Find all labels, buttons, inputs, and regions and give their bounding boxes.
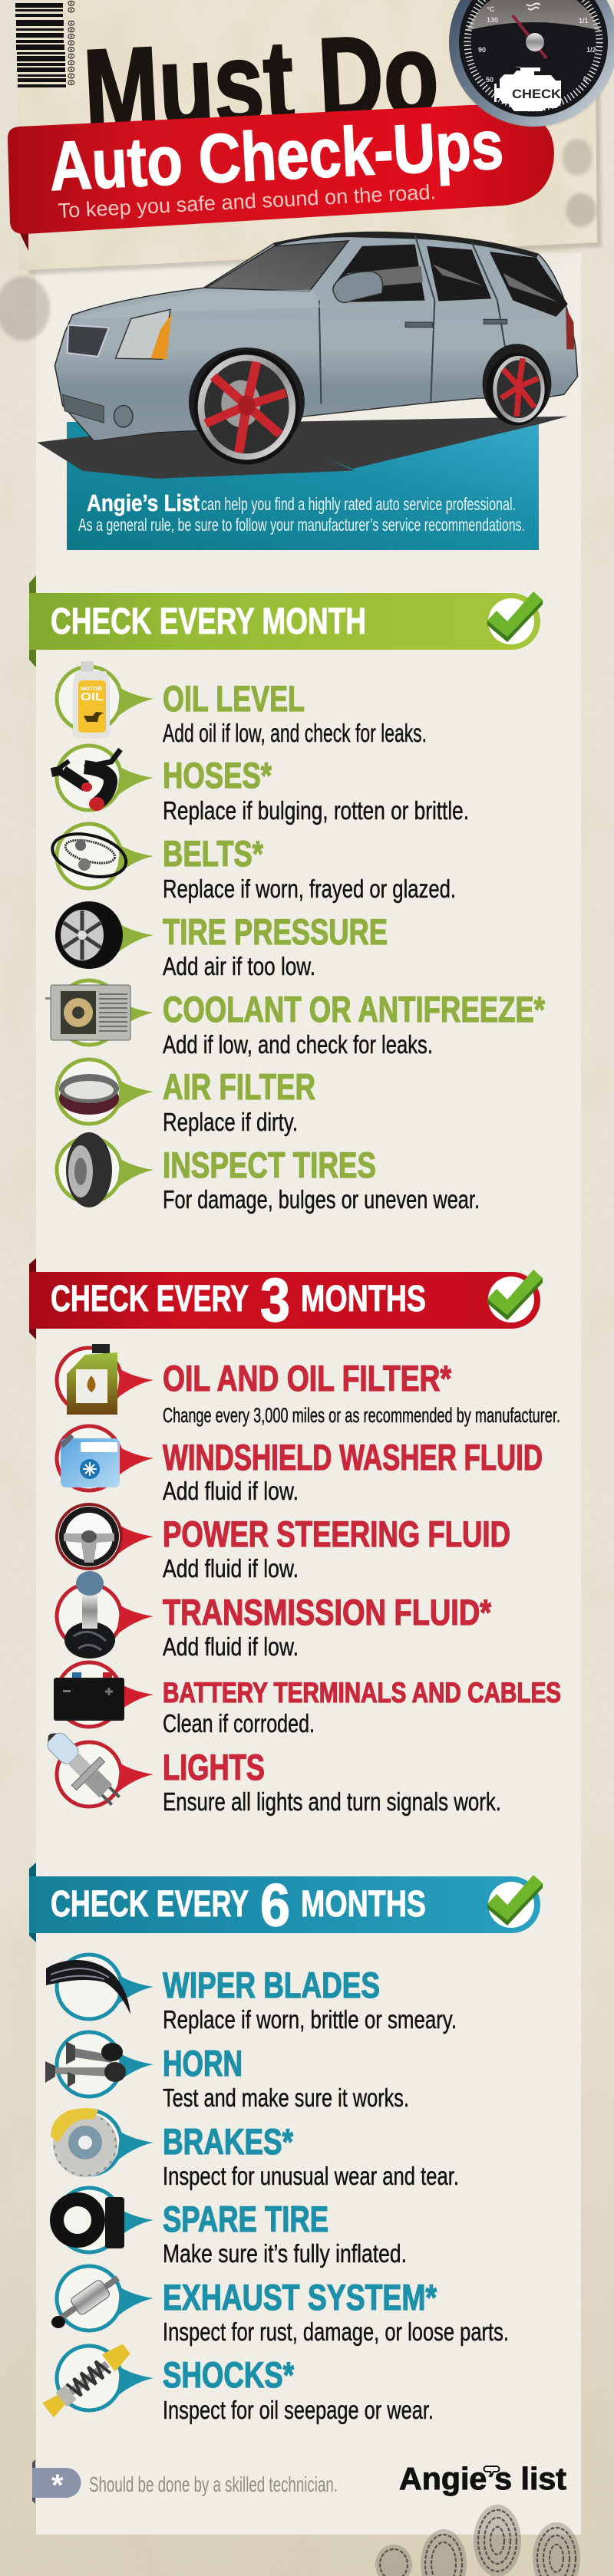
engine check icon xyxy=(494,67,562,111)
months label: MONTHS xyxy=(301,1279,426,1319)
gauge labels: 1/1 xyxy=(579,17,589,25)
item: brakes xyxy=(51,2108,459,2190)
heading: Auto Check-Ups xyxy=(48,107,505,206)
title: OIL AND OIL FILTER* xyxy=(163,1358,452,1398)
headlight xyxy=(116,309,170,359)
icon: air filter xyxy=(57,1059,154,1124)
description: Test and make sure it works. xyxy=(163,2084,409,2112)
info text line 1: Angie’s List xyxy=(87,489,200,516)
grille xyxy=(68,325,109,357)
door handles xyxy=(405,319,507,328)
gauge labels: 1/2 xyxy=(586,46,596,54)
hood highlight xyxy=(74,290,321,318)
asterisk: * xyxy=(51,2469,64,2502)
door lines xyxy=(319,236,505,404)
title: SPARE TIRE xyxy=(163,2199,328,2239)
item: air filter xyxy=(57,1059,315,1136)
subtitle: To keep you safe and sound on the road. xyxy=(58,180,437,222)
description: Add fluid if low. xyxy=(163,1477,299,1505)
icon: steering wheel xyxy=(57,1504,154,1569)
item: tire pressure xyxy=(55,901,388,980)
banner: Auto Check-Ups xyxy=(8,105,554,251)
item: transmission fluid xyxy=(57,1571,492,1661)
item: hoses xyxy=(51,746,469,825)
windshield xyxy=(206,241,348,292)
title: POWER STEERING FLUID xyxy=(163,1514,510,1554)
icon: oil bottle: MOTOR xyxy=(81,687,102,692)
roof strip xyxy=(274,232,539,258)
icon: washer tank xyxy=(57,1426,154,1491)
description: Replace if worn, brittle or smeary. xyxy=(163,2005,457,2034)
section header: check every 3 months xyxy=(29,1258,543,1339)
description: Add air if too low. xyxy=(163,952,315,980)
description: Inspect for unusual wear and tear. xyxy=(163,2162,459,2190)
check badge xyxy=(487,1875,543,1928)
description: Add oil if low, and check for leaks. xyxy=(163,719,427,747)
icon: hoses xyxy=(51,746,154,811)
icon: muffler xyxy=(51,2266,154,2331)
description: Add if low, and check for leaks. xyxy=(163,1030,433,1059)
icon: tire xyxy=(57,1132,154,1207)
icon: belts xyxy=(48,824,154,888)
description: Replace if bulging, rotten or brittle. xyxy=(163,796,469,825)
needle xyxy=(513,15,546,58)
section heading: CHECK EVERY xyxy=(51,1279,249,1319)
section heading: CHECK EVERY MONTH xyxy=(51,601,366,642)
icon: tire and rim xyxy=(55,901,154,969)
title: HOSES* xyxy=(163,755,272,796)
description: Replace if worn, frayed or glazed. xyxy=(163,875,456,903)
item: windshield washer fluid xyxy=(57,1426,543,1505)
middle window xyxy=(427,246,491,301)
check badge xyxy=(487,591,543,644)
inner paper panel xyxy=(36,253,581,2535)
car illustration xyxy=(37,232,578,479)
item: oil level xyxy=(57,661,427,747)
big number: 6 xyxy=(260,1871,290,1939)
logo speech bubble xyxy=(484,2466,499,2476)
gauge labels: 90 xyxy=(478,46,486,54)
title: Must Do: Must Do xyxy=(81,9,441,156)
icon: air horns xyxy=(45,2032,154,2097)
item: power steering fluid xyxy=(57,1504,510,1583)
icon: wipers xyxy=(46,1955,154,2019)
icon: car battery xyxy=(54,1662,154,1727)
item: lights xyxy=(35,1721,501,1816)
icon: radiator xyxy=(45,980,154,1045)
item: belts xyxy=(48,824,456,903)
item: spare tire xyxy=(57,2188,407,2268)
title: EXHAUST SYSTEM* xyxy=(163,2277,437,2317)
title: OIL LEVEL xyxy=(163,678,305,719)
lower grille xyxy=(63,394,104,423)
oil symbol xyxy=(527,3,540,9)
mirror xyxy=(333,272,383,302)
description: Replace if dirty. xyxy=(163,1108,298,1136)
gauge labels: 0 xyxy=(583,75,587,83)
icon: headlight bulb xyxy=(35,1721,154,1815)
title: BRAKES* xyxy=(163,2121,294,2162)
title: AIR FILTER xyxy=(163,1066,315,1107)
title: SHOCKS* xyxy=(163,2354,295,2395)
gauge xyxy=(449,0,614,127)
title: TIRE PRESSURE xyxy=(163,911,388,952)
item: coolant xyxy=(45,980,546,1059)
description: Make sure it’s fully inflated. xyxy=(163,2239,407,2268)
description: Inspect for rust, damage, or loose parts. xyxy=(163,2317,509,2346)
item: shocks xyxy=(41,2340,434,2424)
months label: MONTHS xyxy=(301,1884,426,1925)
icon: oil bottle xyxy=(57,661,154,739)
description: Ensure all lights and turn signals work. xyxy=(163,1787,501,1816)
front door window xyxy=(333,245,425,302)
icon: brake disc xyxy=(51,2108,154,2177)
icon: gear shift xyxy=(57,1571,154,1659)
rear window xyxy=(490,252,568,317)
item: exhaust system xyxy=(51,2266,509,2346)
info box xyxy=(67,422,539,550)
fingerprint smudge left xyxy=(0,276,50,341)
description: Add fluid if low. xyxy=(163,1554,299,1583)
item: battery xyxy=(54,1662,561,1738)
icon: shock absorber xyxy=(41,2340,154,2419)
item: wiper blades xyxy=(46,1955,457,2034)
description: Clean if corroded. xyxy=(163,1709,315,1738)
car body xyxy=(54,232,578,441)
title: INSPECT TIRES xyxy=(163,1145,376,1185)
engine check icon: CHECK xyxy=(512,87,562,101)
title: BELTS* xyxy=(163,833,264,874)
front wheel xyxy=(194,350,299,464)
title: LIGHTS xyxy=(163,1747,265,1787)
wheel arches xyxy=(189,348,305,456)
fingerprints bottom xyxy=(375,2505,580,2576)
icon: oil bottle: OIL xyxy=(81,690,104,703)
section header: check every month xyxy=(29,575,543,667)
check badge xyxy=(487,1270,543,1323)
footnote text: Should be done by a skilled technician. xyxy=(89,2472,338,2496)
footnote tab xyxy=(32,2459,338,2504)
description: Inspect for oil seepage or wear. xyxy=(163,2396,434,2424)
description: Add fluid if low. xyxy=(163,1632,299,1661)
item: inspect tires xyxy=(57,1132,480,1214)
big number: 3 xyxy=(260,1266,290,1334)
gauge labels: °C xyxy=(487,5,495,13)
item: oil and oil filter xyxy=(57,1344,560,1427)
gauge labels: 50 xyxy=(486,76,494,84)
icon: oil can xyxy=(57,1344,154,1415)
icon: spare tire xyxy=(57,2188,154,2252)
item: horn xyxy=(45,2032,409,2112)
barcode: 0000000000 00 xyxy=(66,0,78,86)
gauge labels xyxy=(478,5,596,84)
title: WIPER BLADES xyxy=(163,1965,380,2005)
rear wheel xyxy=(487,353,547,425)
section header: check every 6 months xyxy=(29,1863,543,1942)
description: For damage, bulges or uneven wear. xyxy=(163,1185,480,1214)
car shadow xyxy=(37,417,568,479)
section heading: CHECK EVERY xyxy=(51,1884,249,1925)
barcode xyxy=(15,0,78,87)
title: HORN xyxy=(163,2043,243,2084)
torn note card xyxy=(18,0,602,275)
taillight xyxy=(566,308,574,349)
title: TRANSMISSION FLUID* xyxy=(163,1592,492,1632)
gauge labels: 130 xyxy=(487,16,498,24)
Angie's list logo: Angie’s list xyxy=(399,2461,566,2496)
